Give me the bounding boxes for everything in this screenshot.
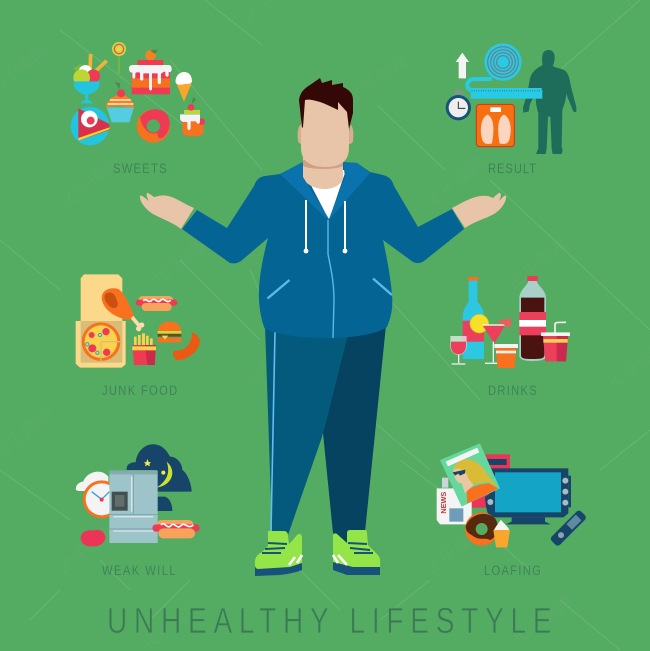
label: loafing: LOAFING bbox=[484, 563, 541, 578]
neck shadow bbox=[303, 160, 343, 169]
neck bbox=[303, 155, 343, 189]
icon: hot dog bbox=[152, 520, 200, 538]
icon: wine glass bbox=[450, 336, 467, 364]
result cluster bbox=[446, 43, 576, 154]
icon: ice cream cup bbox=[493, 520, 510, 547]
text: IC千库网 bbox=[346, 51, 411, 108]
icon: french fries bbox=[132, 333, 156, 365]
hoodie bbox=[182, 162, 464, 338]
drawstrings bbox=[304, 200, 347, 253]
icon: lollipop bbox=[112, 42, 126, 74]
pockets bbox=[268, 278, 392, 298]
icon: magazine with woman bbox=[440, 443, 500, 507]
icon: bathroom scale bbox=[476, 104, 514, 147]
title: UNHEALTHY LIFESTYLE bbox=[107, 601, 552, 641]
trouser stripe bbox=[271, 332, 275, 531]
text: IC千库网 bbox=[331, 431, 396, 488]
icon: ice cream sundae bbox=[73, 54, 107, 103]
icon: lemon slice bbox=[470, 314, 489, 333]
icon: layer cake bbox=[129, 49, 172, 94]
icon: newspaper bbox=[437, 478, 472, 524]
icon: refrigerator bbox=[109, 471, 158, 543]
white t-shirt bbox=[303, 170, 346, 220]
central figure: man with shrug bbox=[140, 78, 506, 576]
weak will cluster bbox=[76, 444, 200, 546]
text: IC千库网 bbox=[59, 154, 124, 211]
drinks cluster bbox=[450, 276, 570, 368]
icon: tomato bbox=[81, 530, 105, 546]
sweets cluster bbox=[71, 42, 205, 145]
icon: ice cream cone bbox=[176, 72, 192, 102]
right hand bbox=[452, 193, 506, 228]
icon: cake slice on plate bbox=[71, 107, 109, 145]
label: weak will: WEAK WILL bbox=[102, 563, 176, 578]
icon: cocktail glass bbox=[483, 318, 512, 363]
text: IC千库网 bbox=[423, 154, 488, 211]
icon: up arrow bbox=[456, 53, 469, 78]
icon: paper cup bbox=[541, 322, 570, 361]
icon: body silhouette bbox=[523, 50, 576, 154]
icon: white cloud bbox=[76, 472, 108, 491]
left hand bbox=[140, 193, 194, 229]
icon: stopwatch bbox=[446, 91, 471, 120]
label: result: RESULT bbox=[488, 161, 536, 176]
left shoe bbox=[255, 531, 302, 576]
icon: iced muffin bbox=[180, 97, 205, 136]
label: junk food: JUNK FOOD bbox=[102, 383, 177, 398]
hood collar bbox=[280, 162, 370, 220]
text: IC千库网 bbox=[511, 591, 576, 648]
icon: remote control bbox=[549, 509, 587, 547]
right shoe bbox=[333, 530, 380, 575]
label: sweets: SWEETS bbox=[113, 161, 167, 176]
icon: red book bbox=[472, 454, 510, 508]
icon: pizza box bbox=[76, 274, 126, 368]
loafing cluster bbox=[437, 443, 587, 547]
left trouser leg bbox=[265, 325, 347, 535]
icon: donut bbox=[137, 109, 170, 143]
label: drinks: DRINKS bbox=[488, 383, 537, 398]
text: IC千库网 bbox=[56, 521, 121, 578]
text: IC千库网 bbox=[241, 336, 306, 393]
face bbox=[301, 95, 349, 167]
icon: alarm clock bbox=[83, 480, 121, 518]
text: IC千库网 bbox=[151, 231, 216, 288]
icon: newspaper: NEWS bbox=[439, 492, 448, 514]
icon: chicken leg bbox=[102, 288, 144, 331]
icon: television bbox=[485, 468, 571, 524]
icon: hot dog bbox=[136, 296, 177, 311]
icon: shot glass bbox=[494, 344, 518, 368]
text: IC千库网 bbox=[506, 236, 571, 293]
icon: burger bbox=[158, 321, 181, 342]
icon: wine bottle bbox=[463, 277, 484, 359]
hair bbox=[299, 78, 353, 129]
junk food cluster bbox=[76, 274, 200, 368]
ears bbox=[298, 125, 353, 144]
text: IC千库网 bbox=[423, 521, 488, 578]
icon: cupcake bbox=[106, 82, 134, 122]
icon: night cloud bbox=[127, 444, 192, 511]
icon: soda bottle bbox=[519, 276, 546, 361]
icon: chocolate donut bbox=[465, 512, 498, 546]
right trouser leg bbox=[323, 325, 386, 545]
icon: croissant bbox=[173, 333, 200, 360]
icon: measuring tape bbox=[467, 43, 542, 99]
zipper bbox=[328, 220, 334, 338]
